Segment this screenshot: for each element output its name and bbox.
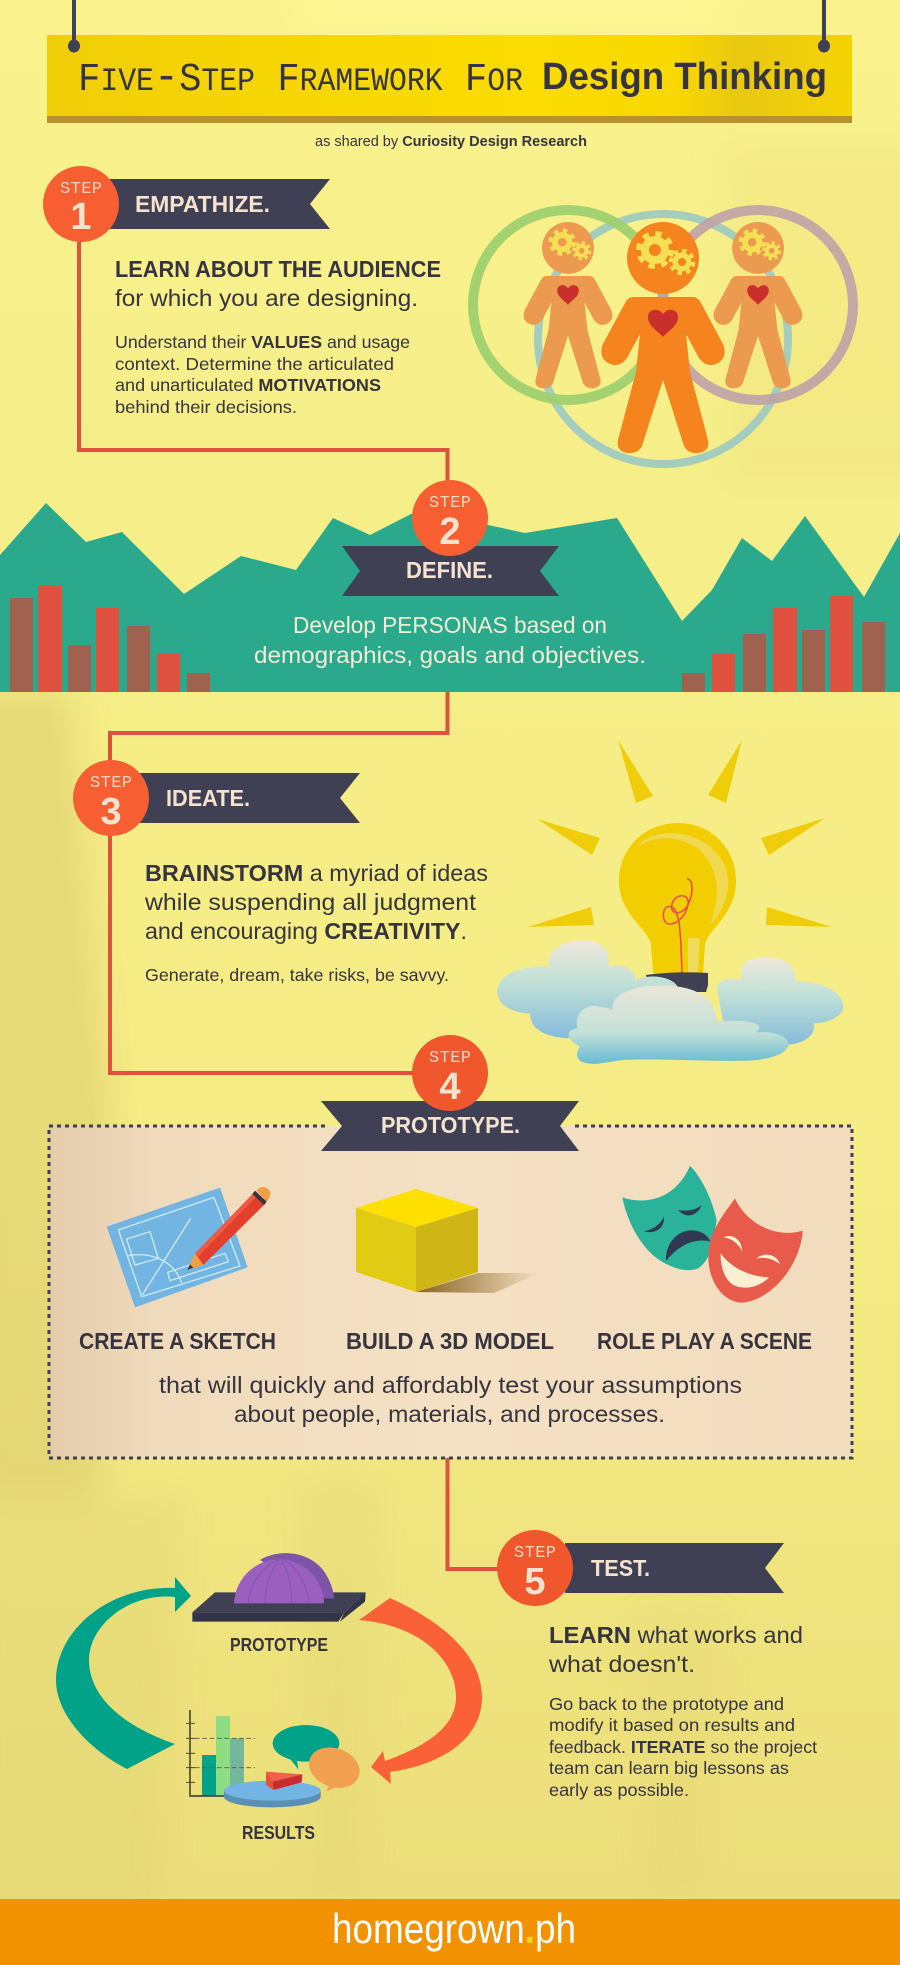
title: Design Thinking bbox=[542, 56, 827, 98]
ribbon: define bbox=[342, 546, 559, 596]
person: center bbox=[601, 222, 725, 453]
badge: step 2 bbox=[412, 480, 488, 556]
step 1 text: for which you are designing. bbox=[115, 285, 418, 311]
circle: green bbox=[473, 210, 663, 400]
prototype description bbox=[159, 1372, 742, 1427]
step 1 header bbox=[43, 166, 330, 242]
badge: step 4: STEP bbox=[429, 1049, 471, 1068]
teal mountain band bbox=[0, 503, 900, 692]
person: left bbox=[524, 222, 612, 388]
icon: sketch bbox=[107, 1187, 270, 1307]
ribbon: empathize: EMPATHIZE. bbox=[135, 191, 270, 217]
step 3 text bbox=[144, 860, 488, 985]
prototype description: about people, materials, and processes. bbox=[234, 1401, 665, 1427]
ribbon: prototype bbox=[321, 1101, 579, 1151]
ribbon: empathize bbox=[109, 179, 330, 229]
ribbon: prototype: PROTOTYPE. bbox=[381, 1112, 520, 1138]
step 1 text: Understand their VALUES and usage bbox=[115, 332, 410, 352]
ribbon: ideate: IDEATE. bbox=[166, 785, 250, 811]
ribbon: test: TEST. bbox=[591, 1555, 650, 1581]
badge: step 2: 2 bbox=[439, 511, 461, 553]
arrow: orange bbox=[359, 1598, 482, 1784]
illustration: audience people in overlapping circles bbox=[473, 210, 853, 464]
person: right bbox=[714, 222, 802, 388]
label: create a sketch: CREATE A SKETCH bbox=[79, 1328, 276, 1354]
badge: step 5: 5 bbox=[524, 1561, 546, 1603]
circle: purple bbox=[663, 210, 853, 400]
badge: step 3: 3 bbox=[100, 791, 122, 833]
prototype description: that will quickly and affordably test your assumptions bbox=[159, 1372, 742, 1398]
step 3 text: Generate, dream, take risks, be savvy. bbox=[145, 965, 449, 985]
step 1 text: and unarticulated MOTIVATIONS bbox=[115, 375, 381, 395]
step 1 text: LEARN ABOUT THE AUDIENCE bbox=[115, 256, 441, 282]
ribbon: ideate bbox=[140, 773, 360, 823]
bar chart left bbox=[10, 585, 210, 692]
title bbox=[78, 53, 827, 104]
step 1 text bbox=[115, 256, 441, 417]
ribbon: test bbox=[565, 1543, 784, 1593]
back clouds bbox=[497, 940, 843, 1045]
badge: step 5: STEP bbox=[514, 1544, 556, 1563]
icon: results charts bbox=[186, 1710, 365, 1807]
footer brand: homegrown.ph bbox=[332, 1905, 576, 1952]
arrow: teal bbox=[56, 1577, 191, 1769]
subtitle credit: as shared by Curiosity Design Research bbox=[315, 134, 587, 150]
badge: step 5 bbox=[497, 1530, 573, 1606]
step 5 text: modify it based on results and bbox=[549, 1715, 795, 1735]
connector line between steps bbox=[79, 240, 500, 1569]
label: prototype: PROTOTYPE bbox=[230, 1635, 328, 1655]
step 1 text: context. Determine the articulated bbox=[115, 354, 394, 374]
bar chart right bbox=[682, 596, 885, 692]
step 2 text bbox=[254, 612, 646, 668]
badge: step 2: STEP bbox=[429, 494, 471, 513]
title: Five-Step Framework For bbox=[78, 53, 523, 104]
label: build a 3D model: BUILD A 3D MODEL bbox=[346, 1328, 554, 1354]
step 2 header bbox=[342, 480, 559, 596]
badge: step 4 bbox=[412, 1035, 488, 1111]
step 1 text: behind their decisions. bbox=[115, 397, 297, 417]
sun rays bbox=[528, 740, 832, 927]
step 5 text: feedback. ITERATE so the project bbox=[549, 1737, 817, 1757]
label: results: RESULTS bbox=[242, 1823, 315, 1843]
step 2 text: demographics, goals and objectives. bbox=[254, 642, 646, 668]
panel: prototype bbox=[49, 1126, 852, 1458]
icon: 3D cube bbox=[356, 1189, 540, 1293]
diagram: prototype and results cycle bbox=[56, 1553, 482, 1843]
step 3 text: BRAINSTORM a myriad of ideas bbox=[145, 860, 488, 886]
icon: theater masks bbox=[622, 1166, 803, 1303]
step 4 header bbox=[321, 1035, 579, 1151]
badge: step 3 bbox=[73, 760, 149, 836]
bulb bbox=[619, 823, 736, 992]
step 5 text: what doesn't. bbox=[548, 1651, 695, 1677]
badge: step 1: STEP bbox=[60, 180, 102, 199]
front cloud bbox=[569, 986, 788, 1064]
step 5 text: early as possible. bbox=[549, 1780, 689, 1800]
step 5 text: Go back to the prototype and bbox=[549, 1694, 784, 1714]
step 5 header bbox=[497, 1530, 784, 1606]
step 3 text: and encouraging CREATIVITY. bbox=[145, 918, 467, 944]
icon: prototype dome on slab bbox=[192, 1553, 366, 1622]
panel dashed border bbox=[49, 1126, 852, 1458]
step 3 header bbox=[73, 760, 360, 836]
illustration: light bulb with clouds bbox=[497, 740, 843, 1064]
banner hanging pin left bbox=[68, 0, 80, 52]
step 2 text: Develop PERSONAS based on bbox=[293, 612, 607, 638]
banner hanging pin right bbox=[818, 0, 830, 52]
step 5 text bbox=[548, 1622, 817, 1800]
panel background bbox=[49, 1126, 852, 1458]
badge: step 3: STEP bbox=[90, 774, 132, 793]
circle: large blue bbox=[538, 214, 788, 464]
badge: step 1: 1 bbox=[70, 196, 92, 238]
header banner bbox=[47, 0, 852, 123]
step 3 text: while suspending all judgment bbox=[144, 889, 476, 915]
badge: step 4: 4 bbox=[439, 1066, 461, 1108]
step 5 text: LEARN what works and bbox=[549, 1622, 803, 1648]
footer bbox=[0, 1899, 900, 1965]
badge: step 1 bbox=[43, 166, 119, 242]
label: role play a scene: ROLE PLAY A SCENE bbox=[597, 1328, 812, 1354]
step 5 text: team can learn big lessons as bbox=[549, 1758, 789, 1778]
ribbon: define: DEFINE. bbox=[406, 557, 493, 583]
